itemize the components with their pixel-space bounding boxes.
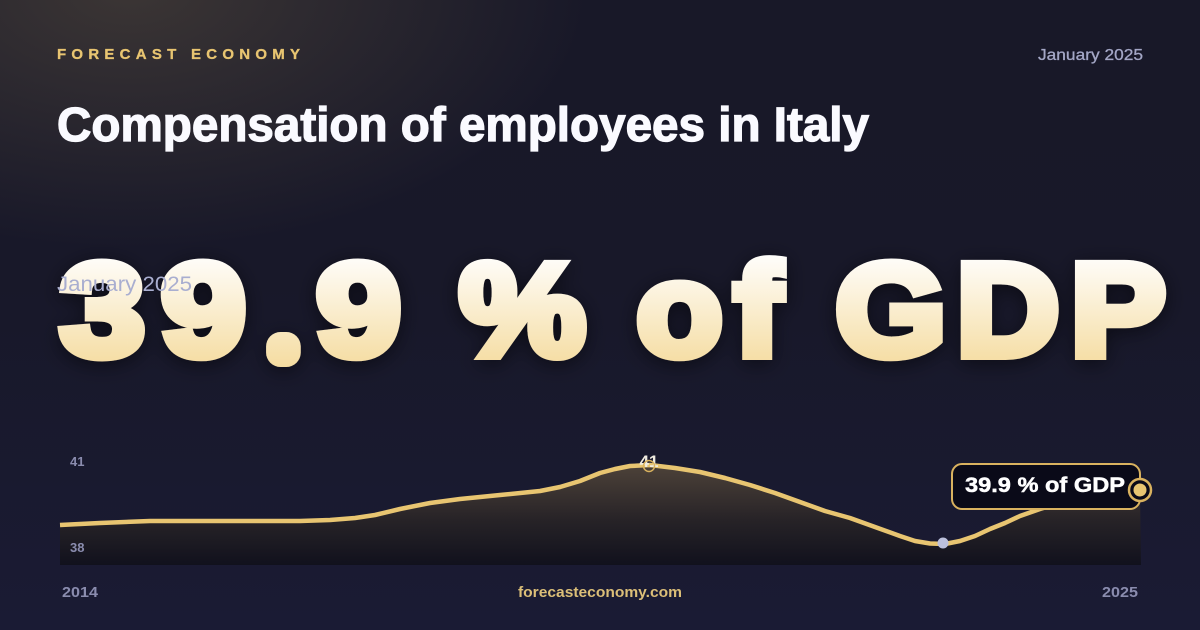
line	[60, 465, 1060, 544]
chart	[60, 452, 1151, 565]
hero value: %	[460, 237, 585, 383]
date top right: January 2025	[1038, 47, 1143, 64]
x axis end year: 2025	[1102, 585, 1138, 601]
y axis labels: 41	[70, 454, 84, 469]
hero value: .	[278, 318, 289, 362]
hero value: GDP	[836, 236, 1166, 383]
y axis labels	[70, 454, 84, 555]
y axis labels: 38	[70, 540, 84, 555]
title: Compensation of employees in Italy	[57, 99, 869, 152]
kicker: Forecast Economy: FORECAST ECONOMY	[57, 46, 300, 63]
hero value	[60, 236, 1166, 384]
area fill	[60, 465, 1141, 565]
hero value: 9	[316, 238, 401, 384]
low point marker	[938, 538, 948, 548]
callout	[952, 464, 1140, 509]
overlapping date label: January 2025	[57, 273, 192, 296]
callout: 39.9 % of GDP	[965, 474, 1125, 497]
peak marker	[644, 460, 654, 472]
end marker	[1129, 479, 1151, 501]
x axis start year: 2014	[62, 585, 98, 601]
hero value: of	[637, 237, 782, 383]
peak label: 41	[640, 452, 658, 471]
hero value: 39	[60, 238, 246, 384]
source url: forecasteconomy.com	[518, 585, 682, 601]
